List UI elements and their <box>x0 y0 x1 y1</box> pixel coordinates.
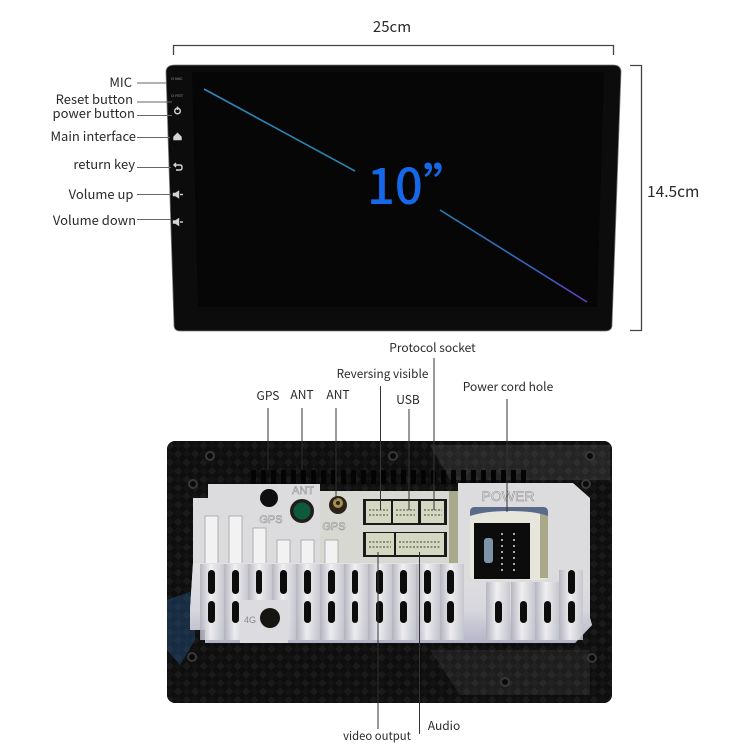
POWER socket recess <box>470 507 548 580</box>
ANT engraved label: ANT <box>292 485 314 497</box>
diagonal line upper <box>204 89 355 171</box>
side button icons: O RST <box>171 93 184 98</box>
silver metal chassis <box>190 483 592 643</box>
rear labels and leader lines: ANT <box>290 386 314 403</box>
front labels and leader lines: return key <box>73 154 135 173</box>
front labels and leader lines: MIC <box>109 72 132 91</box>
rear labels and leader lines: USB <box>396 391 420 408</box>
panel: rear housing <box>167 441 612 703</box>
lower heat-sink fins <box>200 564 583 640</box>
light carbon highlight <box>430 650 590 695</box>
side button icons <box>171 76 184 225</box>
dimension: height 14.5cm: 14.5cm <box>647 180 699 202</box>
rear labels and leader lines: GPS <box>257 387 279 404</box>
4G hole <box>244 608 280 628</box>
dimension: width 25cm <box>174 16 614 55</box>
lower heat-sink body <box>190 563 592 643</box>
rear labels and leader lines: Reversing visible <box>337 365 429 382</box>
front labels and leader lines: Main interface <box>50 126 136 145</box>
panel: front screen <box>166 65 621 331</box>
front labels and leader lines: power button <box>53 103 135 122</box>
carbon fibre back plate <box>167 441 612 703</box>
front labels and leader lines: Reset button <box>56 89 133 108</box>
connector bay <box>320 491 458 563</box>
vent slots <box>251 470 526 484</box>
4G hole: 4G <box>244 615 256 625</box>
blue carbon highlight <box>167 590 195 665</box>
black fin slots <box>208 570 575 623</box>
diagonal line lower <box>440 210 587 302</box>
screw holes <box>188 452 596 686</box>
connector block upper <box>363 499 447 525</box>
front labels and leader lines <box>50 72 172 229</box>
rear labels and leader lines: Protocol socket <box>389 339 476 356</box>
size label 10 inch: 10” <box>367 148 472 219</box>
rear labels and leader lines <box>257 339 554 744</box>
GPS engraved label 2: GPS <box>322 521 346 533</box>
side button icons: O MIC <box>171 76 183 81</box>
rear labels and leader lines: Audio <box>428 717 460 734</box>
GPS engraved label: GPS <box>259 514 283 526</box>
POWER engraved label: POWER <box>482 488 534 504</box>
gold coax connector <box>329 496 347 514</box>
4G plate <box>240 600 288 643</box>
green antenna socket <box>290 499 314 523</box>
dimension: height 14.5cm <box>630 66 699 330</box>
rear labels and leader lines: ANT <box>326 386 350 403</box>
front labels and leader lines: Volume up <box>69 184 134 203</box>
rear labels and leader lines: video output <box>343 728 412 744</box>
connector block lower <box>363 532 447 557</box>
display area <box>192 72 604 307</box>
screen bezel <box>166 65 621 331</box>
rear labels and leader lines: Power cord hole <box>463 378 554 395</box>
upper fin panels <box>205 516 338 566</box>
dimension: width 25cm: 25cm <box>373 16 411 37</box>
front labels and leader lines: Volume down <box>53 210 136 229</box>
GPS hole <box>260 489 278 507</box>
